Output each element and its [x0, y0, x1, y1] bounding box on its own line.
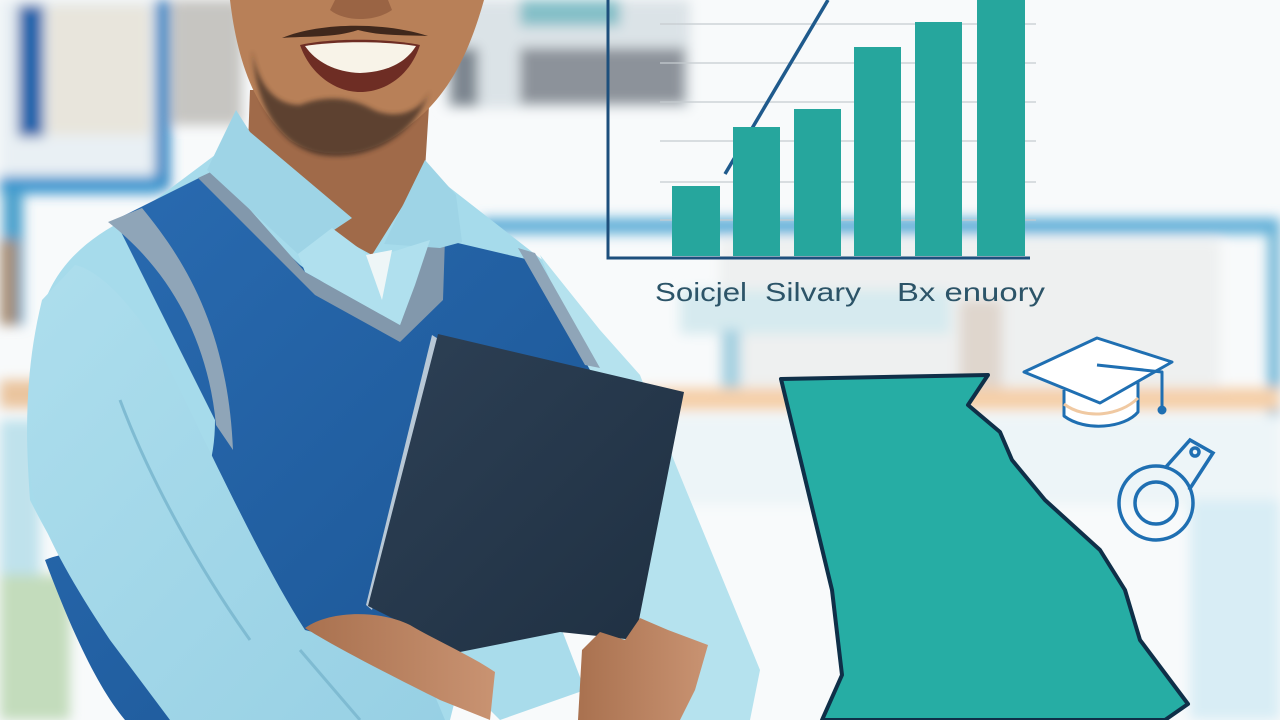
trend line — [725, 0, 828, 174]
face — [230, 0, 484, 156]
collar — [207, 110, 462, 325]
shirt body — [27, 125, 585, 720]
axes — [608, 0, 1030, 258]
person — [27, 0, 760, 720]
map of Georgia — [781, 375, 1188, 720]
vest trim left — [108, 208, 233, 450]
gridlines — [660, 24, 1036, 220]
vest neck trim — [198, 170, 445, 342]
icon: graduation cap — [1024, 338, 1172, 426]
axis labels: Soicjel — [655, 277, 747, 307]
bars — [672, 0, 1025, 256]
folder — [366, 334, 684, 652]
right cuff — [460, 625, 585, 720]
vest trim right — [518, 248, 600, 368]
axis labels: Silvary — [765, 277, 861, 307]
smile — [300, 40, 420, 92]
bar chart — [608, 0, 1045, 307]
axis labels — [655, 277, 1045, 307]
icon: ring key — [1119, 440, 1213, 540]
axis labels: Bx enuory — [897, 277, 1045, 307]
front sleeve — [28, 265, 445, 720]
hands — [305, 614, 495, 720]
right shoulder sleeve — [540, 255, 760, 720]
vest — [45, 175, 590, 720]
neck — [248, 90, 430, 255]
